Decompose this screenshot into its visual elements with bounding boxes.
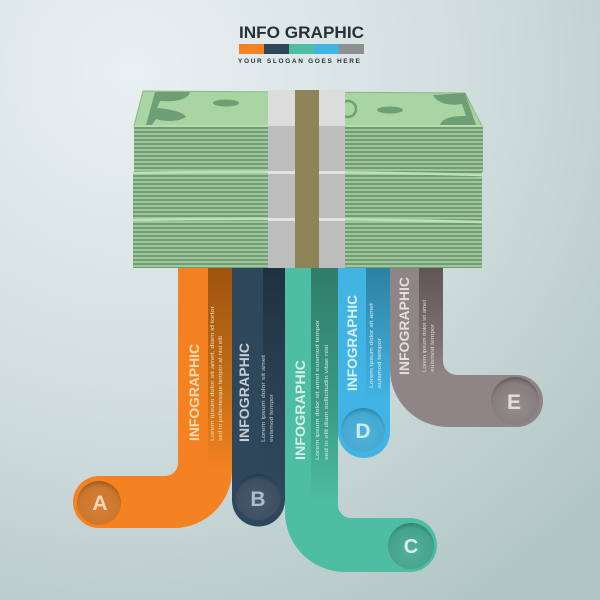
ribbon E heading: INFOGRAPHIC — [397, 277, 412, 375]
ribbon A letter: A — [92, 492, 108, 515]
ribbon B badge — [235, 474, 281, 520]
ribbon D shaded strip — [366, 262, 390, 400]
ribbon A — [73, 262, 232, 528]
title block — [238, 24, 364, 65]
ribbon A body text: Lorem ipsum dolor sit amet, diam id tortor — [210, 306, 216, 441]
ribbon B letter: B — [250, 488, 266, 511]
ribbon C heading: INFOGRAPHIC — [293, 360, 308, 460]
bill layers — [133, 126, 483, 268]
ribbon C letter: C — [404, 536, 418, 558]
top bill — [134, 91, 482, 126]
slogan: YOUR SLOGAN GOES HERE — [238, 58, 361, 65]
ribbon C — [285, 262, 437, 572]
ribbon D body text: Lorem ipsum dolor sit amet — [369, 302, 375, 388]
ribbon A badge — [77, 481, 121, 525]
colour bar — [239, 44, 364, 54]
ribbon A shaded strip — [208, 262, 232, 472]
ribbon E shaded strip — [419, 262, 443, 374]
money stack — [133, 90, 483, 268]
ribbon D body — [338, 262, 390, 458]
ribbon B body text: Lorem ipsum dolor sit amet — [261, 354, 267, 442]
ribbon D body text line 2: euismod tempor — [377, 338, 383, 388]
ribbon E — [390, 262, 543, 427]
ribbon D letter: D — [355, 420, 371, 443]
ribbon C body text: Lorem ipsum dolor sit amet euismod tempor — [315, 320, 321, 460]
ribbon E letter: E — [507, 391, 521, 414]
ribbon E body text line 2: euismod tempor — [430, 324, 436, 372]
ribbon D heading: INFOGRAPHIC — [345, 295, 360, 391]
ribbon E badge — [491, 377, 539, 425]
title: INFO GRAPHIC — [239, 24, 364, 42]
ribbon E body text: Lorem ipsum dolor sit amet — [422, 300, 428, 372]
ribbon D badge — [341, 408, 385, 452]
ribbon B shaded strip — [263, 262, 285, 477]
ribbon B — [232, 262, 285, 526]
ribbon B body text line 2: euismod tempor — [269, 394, 275, 442]
ribbon E body — [390, 262, 543, 427]
ribbon C body text line 2: sed in elit diam sollicitudin vitae nisi — [324, 345, 330, 460]
ribbon B heading: INFOGRAPHIC — [237, 343, 252, 442]
ribbon C body — [285, 262, 437, 572]
ribbon B body — [232, 262, 285, 526]
ribbon C badge — [388, 523, 434, 569]
ribbon A body — [73, 262, 232, 528]
ribbon A body text line 2: sed in pellentesque tempor at nisi elit — [218, 335, 224, 441]
ribbon C shaded strip — [311, 262, 338, 502]
paper band — [268, 90, 345, 268]
ribbon A heading: INFOGRAPHIC — [187, 344, 202, 441]
ribbon D — [338, 262, 390, 458]
